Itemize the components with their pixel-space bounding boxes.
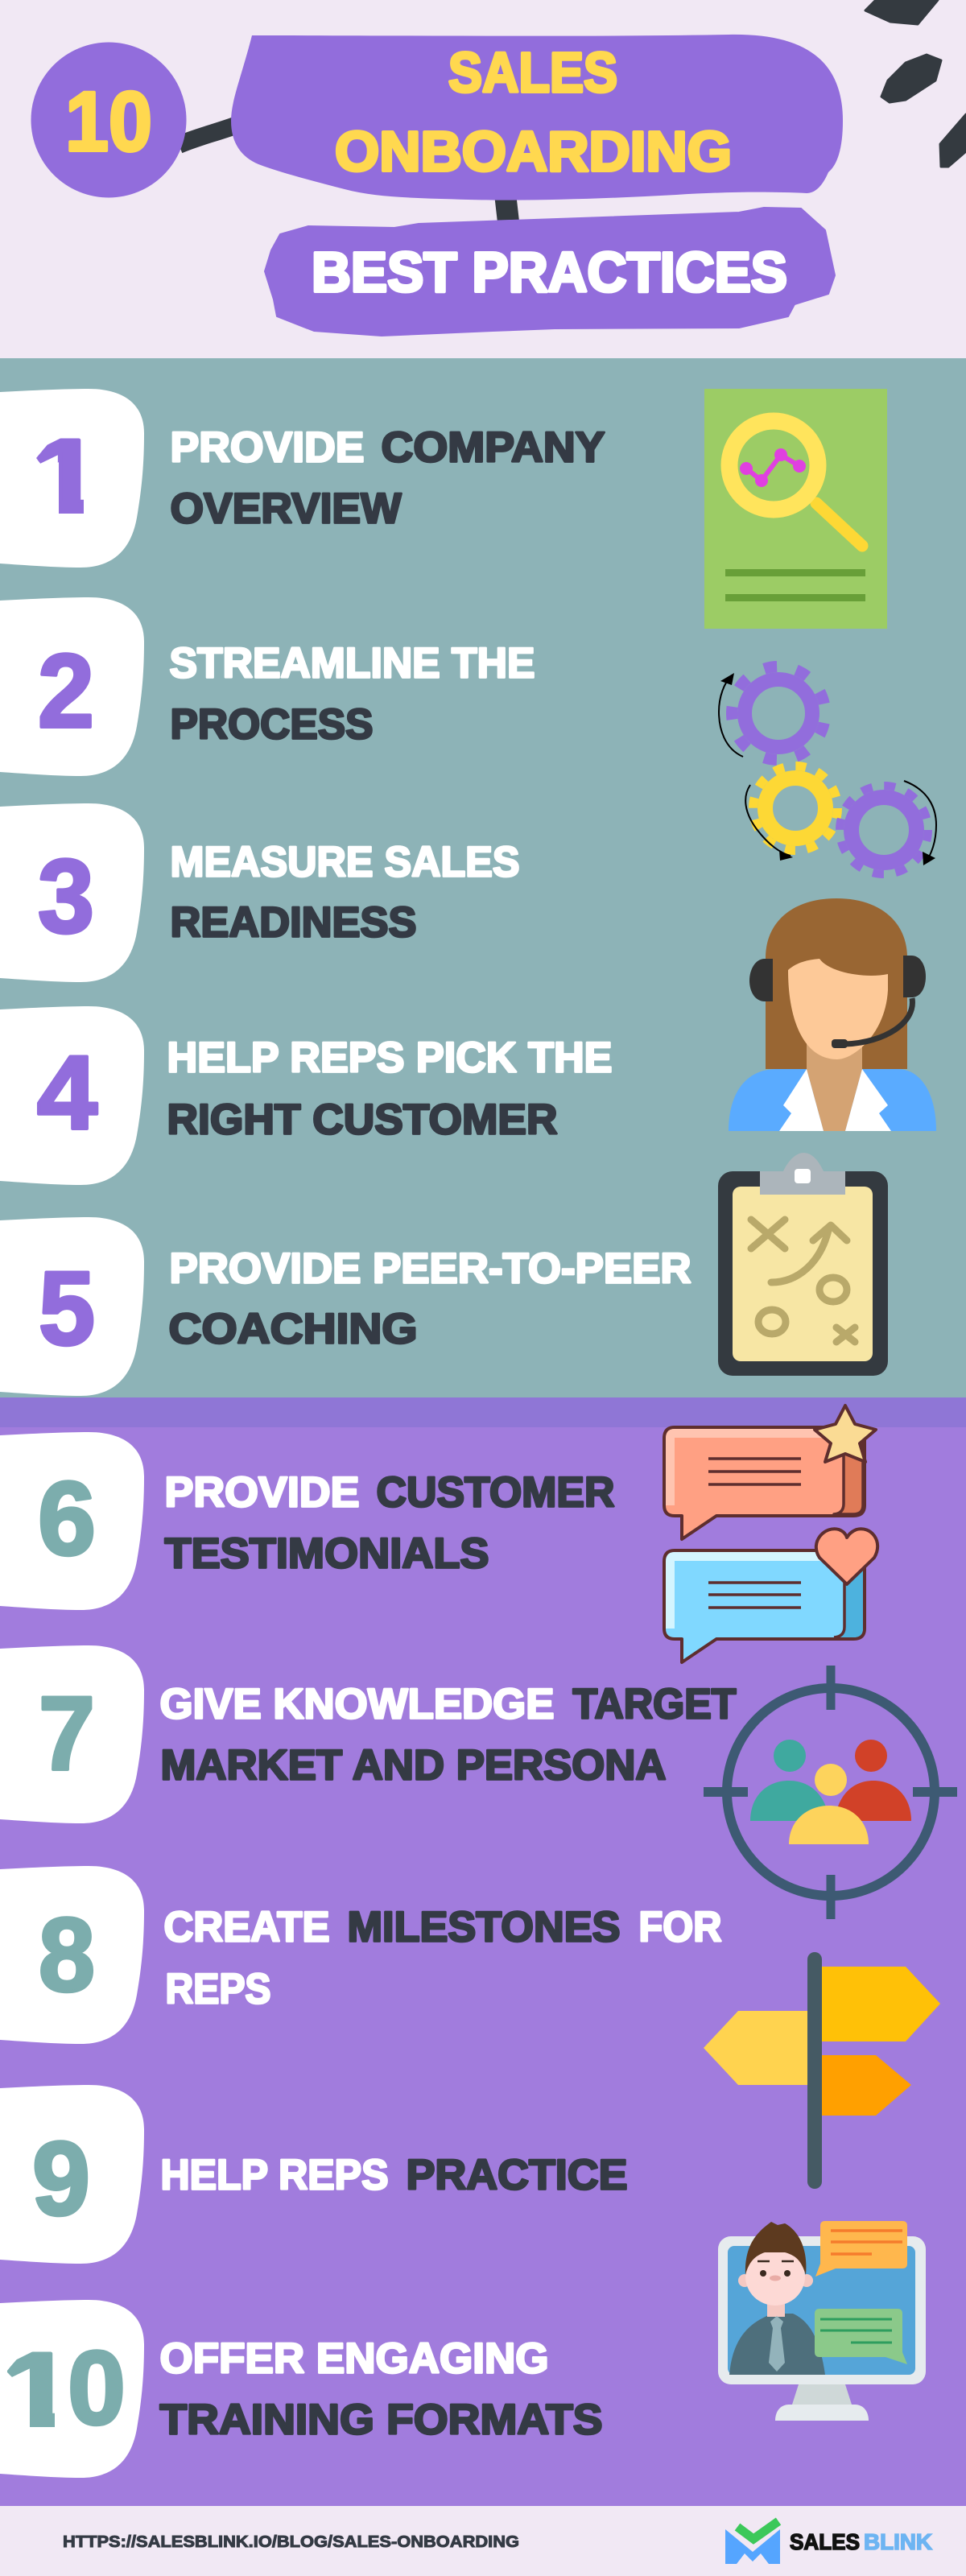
item 10 (0, 2300, 602, 2478)
number 7: 7 (39, 1674, 95, 1792)
label 5: PROVIDE PEER-TO-PEER (169, 1245, 691, 1293)
label 8: REPS (166, 1966, 270, 2013)
badge: 10: 10 (65, 75, 152, 169)
label 9: HELP REPS (161, 2152, 388, 2199)
label 6: PROVIDE (164, 1469, 359, 1517)
item 5 (0, 1217, 691, 1396)
title banner: best practices (265, 208, 835, 336)
number 9: 9 (32, 2120, 90, 2237)
icon: clipboard with play diagram (718, 1153, 888, 1376)
number 3: 3 (38, 837, 94, 955)
label 4: HELP REPS PICK THE (167, 1034, 612, 1082)
title banner: sales onboarding: ONBOARDING (335, 120, 732, 183)
item 2 (0, 597, 535, 776)
label 1: PROVIDE (171, 424, 364, 472)
icon: support agent with headset (729, 898, 936, 1131)
icon: target audience crosshair (704, 1666, 957, 1919)
label 4: RIGHT CUSTOMER (167, 1096, 557, 1144)
label 6: TESTIMONIALS (164, 1530, 489, 1578)
label 1: COMPANY (382, 424, 605, 472)
label 8: MILESTONES (348, 1904, 620, 1951)
label 4 (167, 1034, 612, 1144)
item 1 (0, 389, 605, 568)
card 5 (0, 1217, 144, 1396)
item 8 (0, 1866, 721, 2044)
label 7: MARKET AND PERSONA (161, 1742, 667, 1790)
title banner: sales onboarding: SALES (448, 41, 617, 104)
header connector lines (179, 125, 509, 225)
label 3: MEASURE SALES (171, 839, 520, 886)
badge: 10 (31, 42, 187, 198)
card 8 (0, 1866, 144, 2044)
label 3: READINESS (171, 899, 417, 947)
card 7 (0, 1645, 144, 1823)
card 6 (0, 1432, 144, 1610)
icon: gears with arrows (719, 658, 936, 874)
label 8: CREATE (164, 1904, 330, 1951)
card 10 (0, 2300, 144, 2478)
card 3 (0, 803, 144, 982)
item 7 (0, 1645, 736, 1823)
logo wordmark: SALES (790, 2529, 860, 2554)
label 10: OFFER ENGAGING (159, 2335, 549, 2383)
card 1 (0, 389, 144, 568)
item 4 (0, 1006, 612, 1185)
label 8: FOR (639, 1904, 721, 1951)
footer logo (725, 2521, 932, 2564)
label 5 (169, 1245, 691, 1353)
icon: testimonial chat bubbles (664, 1406, 877, 1662)
card 2 (0, 597, 144, 776)
label 8 (164, 1904, 721, 2013)
label 2: STREAMLINE THE (169, 640, 535, 687)
number 10 (6, 2349, 123, 2427)
label 10 (159, 2335, 602, 2444)
label 6 (164, 1469, 615, 1578)
title banner: sales onboarding (231, 35, 843, 200)
number 1: 1 (28, 417, 104, 535)
item 6 (0, 1432, 615, 1610)
number 10: 1 (0, 2330, 76, 2448)
logo mark (725, 2521, 780, 2564)
number 2: 2 (38, 632, 94, 749)
icon: milestone signpost (704, 1952, 940, 2189)
footer url: HTTPS://SALESBLINK.IO/BLOG/SALES-ONBOARDING (63, 2533, 519, 2551)
number 5: 5 (39, 1249, 95, 1367)
number 10: 0 (68, 2329, 126, 2446)
logo wordmark (790, 2529, 932, 2554)
number 6: 6 (38, 1459, 96, 1577)
title banner: best practices: BEST PRACTICES (312, 241, 787, 303)
label 1: OVERVIEW (171, 485, 402, 533)
label 7: GIVE KNOWLEDGE (159, 1681, 554, 1728)
icon: online training monitor (718, 2221, 926, 2421)
number 4: 4 (37, 1034, 97, 1151)
number 8: 8 (39, 1896, 95, 2013)
decorative rocks (865, 0, 966, 167)
label 9 (161, 2152, 628, 2199)
card 4 (0, 1006, 144, 1185)
logo wordmark: BLINK (864, 2529, 932, 2554)
label 2: PROCESS (171, 701, 374, 749)
label 9: PRACTICE (406, 2152, 628, 2199)
label 2 (169, 640, 535, 749)
label 5: COACHING (169, 1306, 417, 1353)
label 3 (171, 839, 520, 947)
item 3 (0, 803, 520, 982)
label 7 (159, 1681, 736, 1790)
label 10: TRAINING FORMATS (159, 2396, 602, 2444)
label 6: CUSTOMER (377, 1469, 615, 1517)
card 9 (0, 2085, 144, 2264)
icon: report with magnifier (704, 389, 887, 629)
item 9 (0, 2085, 628, 2264)
label 1 (171, 424, 605, 533)
label 7: TARGET (573, 1681, 736, 1728)
